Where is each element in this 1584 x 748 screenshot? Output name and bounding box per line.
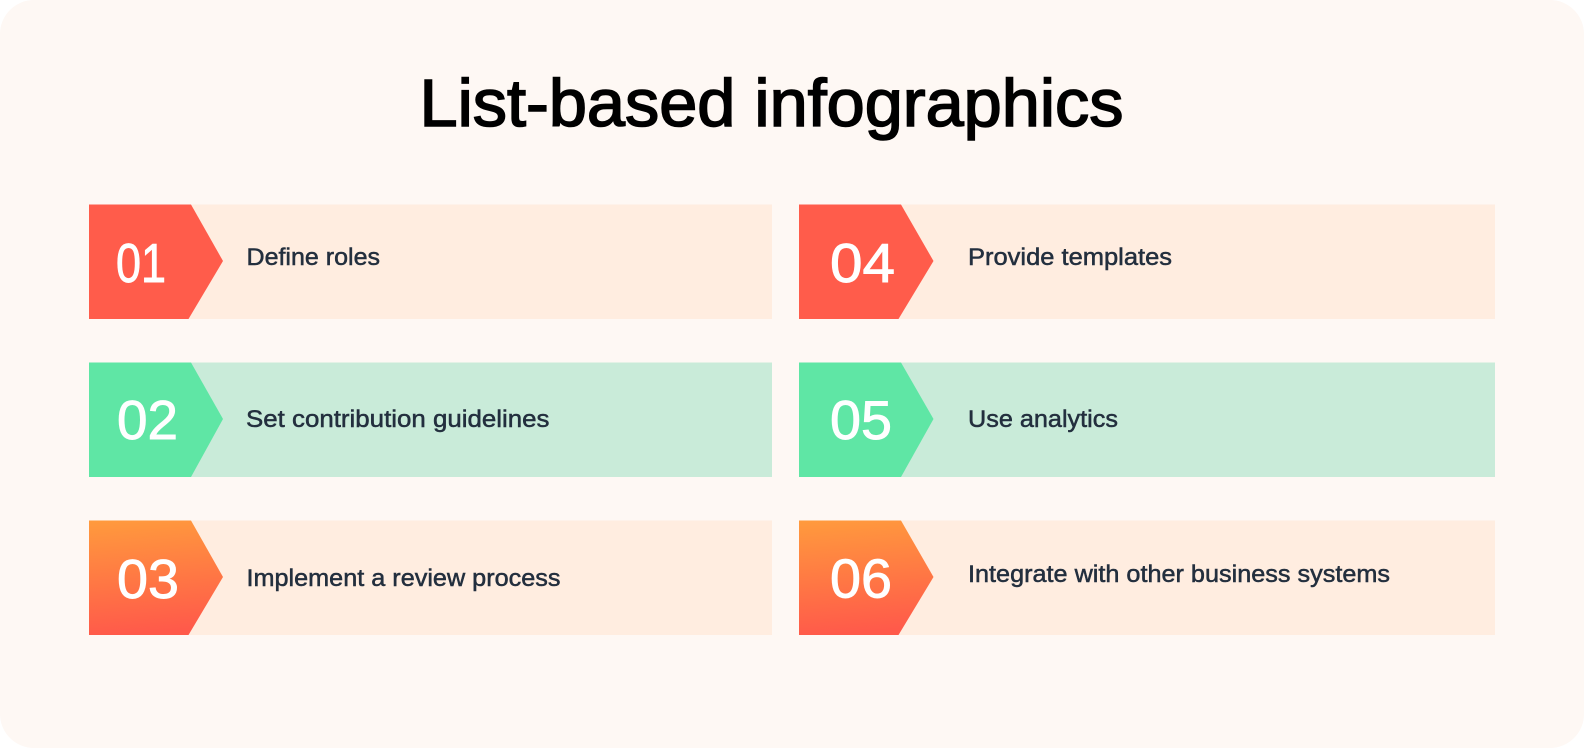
badge: 05 xyxy=(799,362,934,477)
label: Use analytics: Use analytics xyxy=(968,406,1118,433)
list item 02 xyxy=(89,362,772,477)
list item 03 xyxy=(89,520,772,635)
number: 01: 01 xyxy=(116,232,166,294)
list item 04 xyxy=(799,204,1495,319)
number: 02: 02 xyxy=(117,389,178,451)
list item 01 xyxy=(89,204,772,319)
label: Implement a review process: Implement a review process xyxy=(246,565,560,592)
number: 04: 04 xyxy=(830,232,895,294)
label: Integrate with other business systems: Integrate with other business systems xyxy=(968,561,1390,588)
label: Define roles: Define roles xyxy=(246,244,380,271)
number: 06: 06 xyxy=(830,548,892,610)
list item 06 xyxy=(799,520,1495,635)
badge: 03 xyxy=(89,520,223,635)
badge: 04 xyxy=(799,204,934,319)
badge: 01 xyxy=(89,204,223,319)
badge: 06 xyxy=(799,520,934,635)
badge: 02 xyxy=(89,362,223,477)
title: List-based infographics xyxy=(420,66,1124,141)
number: 03: 03 xyxy=(117,548,179,610)
list item 05 xyxy=(799,362,1495,477)
label: Set contribution guidelines: Set contribution guidelines xyxy=(246,406,550,433)
label: Provide templates: Provide templates xyxy=(968,244,1172,271)
number: 05: 05 xyxy=(830,389,892,451)
